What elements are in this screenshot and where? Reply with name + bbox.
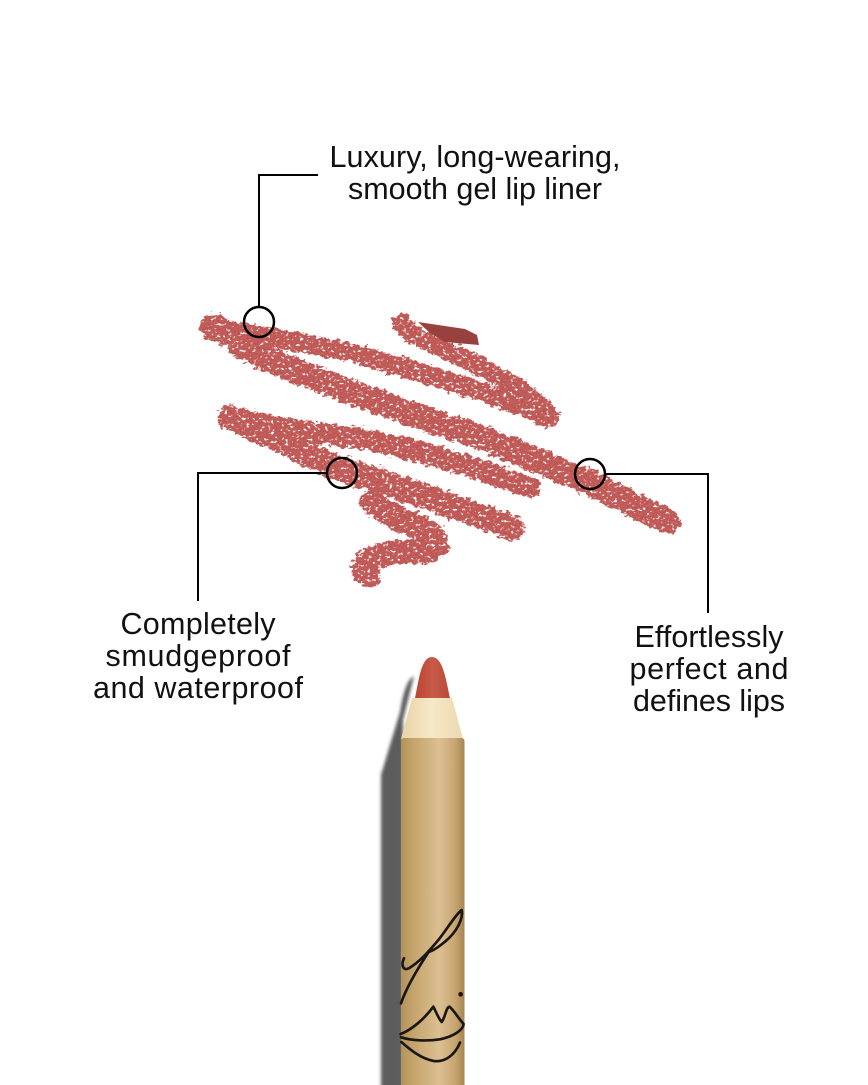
pencil shadow	[381, 676, 414, 1085]
callout: defines lips: perfect and	[630, 652, 788, 686]
pencil tip	[415, 657, 450, 698]
swatch dark smear	[418, 322, 479, 345]
callout: smudgeproof: smudgeproof	[106, 639, 291, 673]
pencil	[401, 657, 464, 1085]
callout: smudgeproof: and waterproof	[93, 671, 304, 705]
callout: long-wearing gel: smooth gel lip liner	[348, 172, 602, 206]
pencil gold barrel	[401, 738, 464, 1085]
lip liner swatch scribble	[213, 323, 668, 576]
callout text: luxury: Luxury, long-wearing,	[330, 140, 620, 174]
callout: defines lips	[575, 459, 788, 718]
callout: long-wearing gel	[244, 140, 620, 337]
pencil wood	[401, 698, 463, 739]
icon: lips logo	[401, 910, 464, 1061]
callout text: smudgeproof: Completely	[120, 607, 276, 641]
callout: defines lips: defines lips	[633, 684, 785, 718]
callout: smudgeproof	[93, 458, 357, 705]
callout text: effortlessly: Effortlessly	[634, 620, 784, 654]
